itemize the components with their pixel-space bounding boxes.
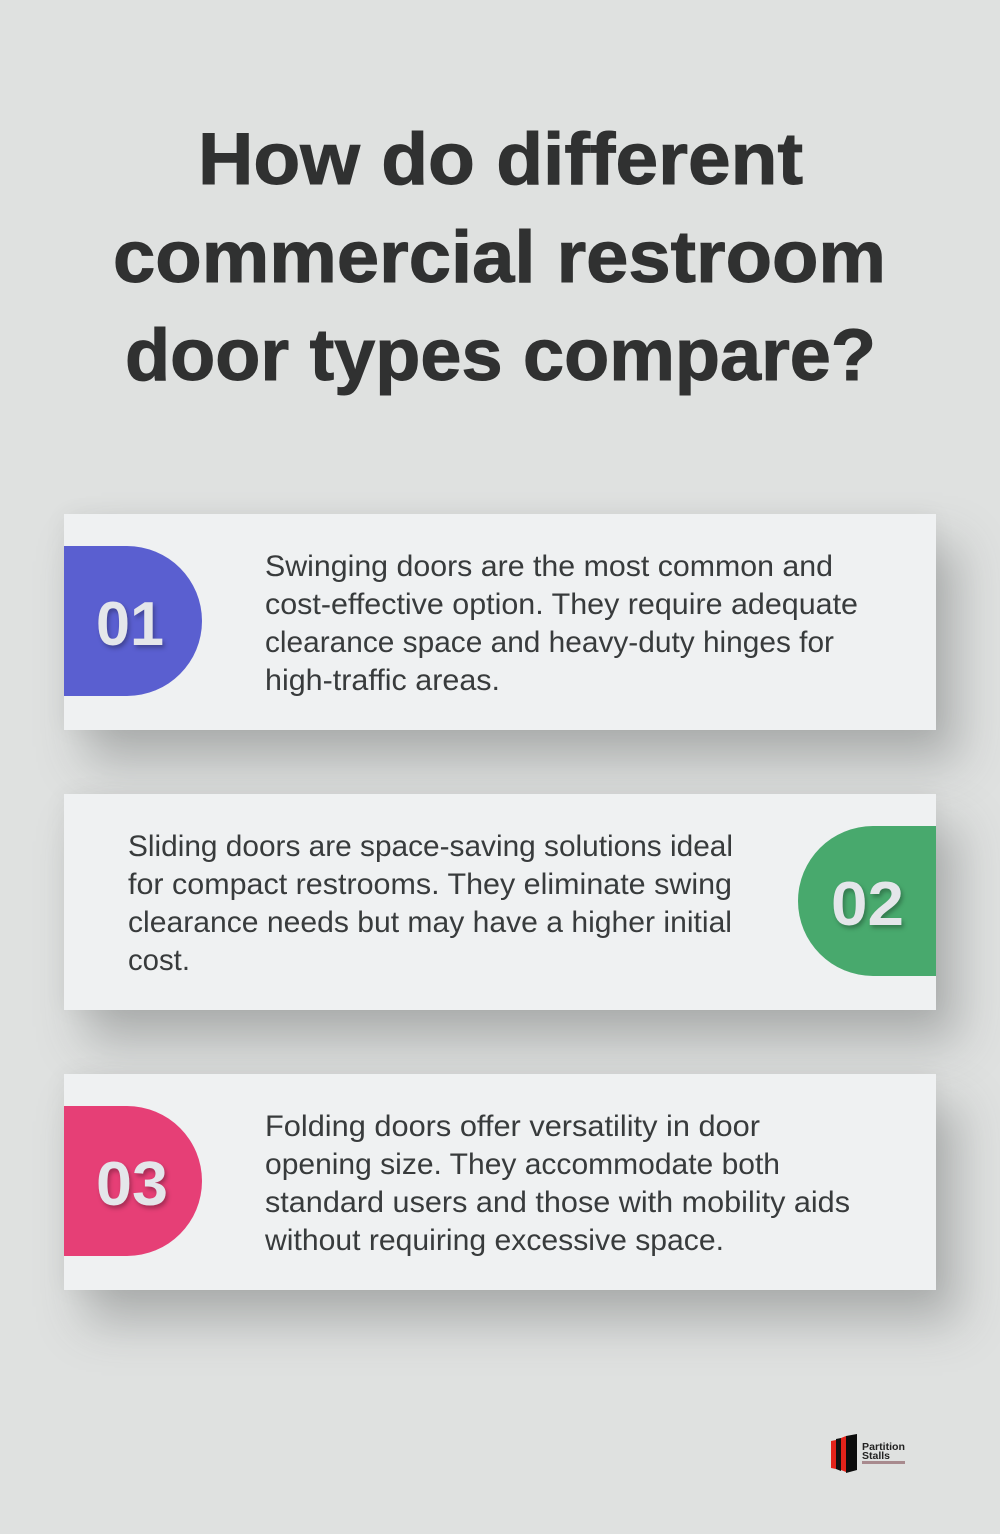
- text: folding doors description: without requiring excessive space.: [264, 1224, 724, 1257]
- text: swinging doors description: [265, 550, 858, 697]
- logo: Partition Stalls: Stalls: [862, 1451, 890, 1462]
- badge: 01: 01: [96, 590, 164, 659]
- text: swinging doors description: cost-effective option. They require adequate: [265, 588, 858, 621]
- panel: swinging doors: [64, 514, 936, 730]
- text: sliding doors description: Sliding doors are space-saving solutions ideal: [128, 830, 733, 863]
- title: commercial restroom: [113, 217, 886, 298]
- text: swinging doors description: clearance space and heavy-duty hinges for: [265, 626, 834, 659]
- text: folding doors description: [264, 1110, 850, 1257]
- panel: folding doors: [64, 1074, 936, 1290]
- panel: sliding doors: [64, 794, 936, 1010]
- title: [113, 119, 886, 396]
- text: sliding doors description: cost.: [128, 944, 190, 977]
- logo: Partition Stalls: Partition: [862, 1442, 905, 1453]
- badge: 03: 03: [96, 1150, 168, 1219]
- text: folding doors description: standard users and those with mobility aids: [265, 1186, 850, 1219]
- text: sliding doors description: [128, 830, 733, 977]
- text: folding doors description: opening size. They accommodate both: [265, 1148, 780, 1181]
- badge: 03: [64, 1106, 202, 1256]
- text: folding doors description: Folding doors offer versatility in door: [265, 1110, 760, 1143]
- text: swinging doors description: Swinging doors are the most common and: [265, 550, 833, 583]
- title: How do different: [198, 119, 803, 200]
- text: sliding doors description: for compact restrooms. They eliminate swing: [128, 868, 732, 901]
- badge: 02: [798, 826, 936, 976]
- text: swinging doors description: high-traffic areas.: [265, 664, 500, 697]
- badge: 01: [64, 546, 202, 696]
- title: door types compare?: [125, 315, 876, 396]
- badge: 02: 02: [831, 870, 904, 939]
- text: sliding doors description: clearance needs but may have a higher initial: [128, 906, 732, 939]
